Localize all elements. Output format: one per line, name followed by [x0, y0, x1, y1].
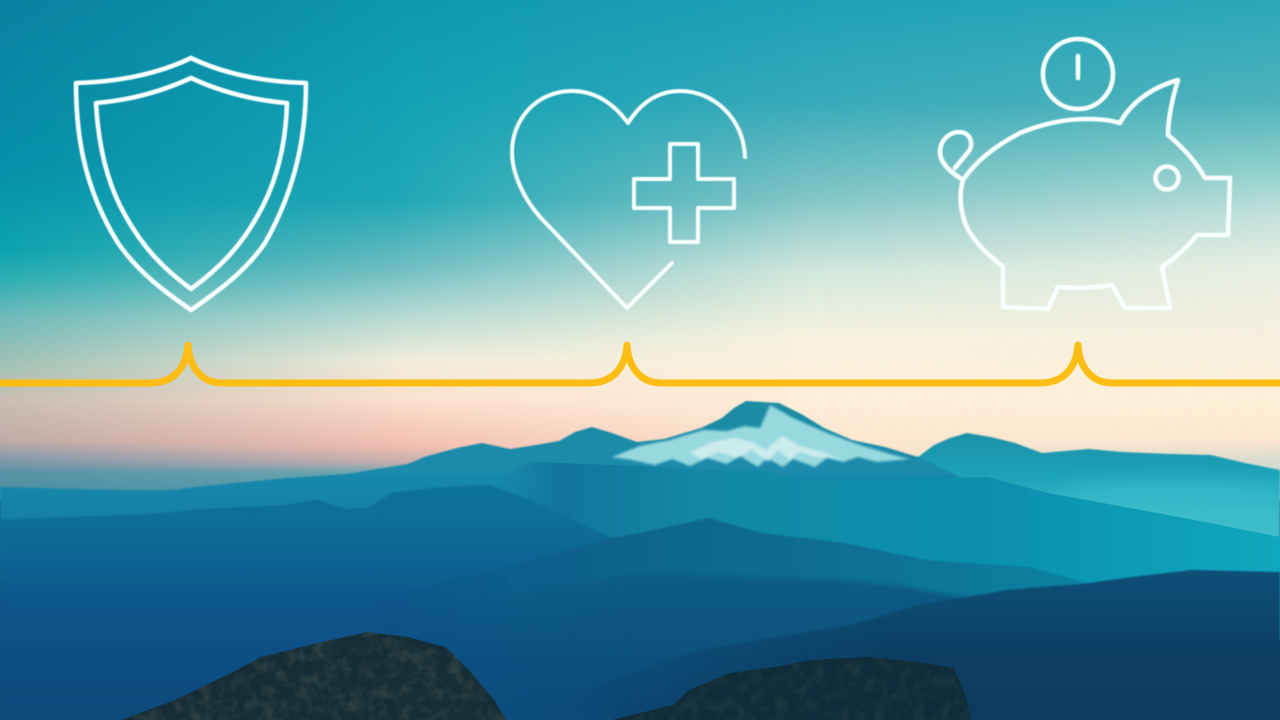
timeline: yellow line with three peaks	[0, 345, 1280, 383]
icon: piggy bank with coin	[940, 39, 1230, 309]
foreground rock: left	[122, 632, 506, 720]
pig eye	[1156, 166, 1178, 190]
icon: heart with plus	[512, 91, 745, 308]
far right range	[900, 433, 1280, 580]
centre ridge	[380, 518, 1085, 660]
mid teal range	[502, 462, 1280, 640]
left mid range	[0, 485, 700, 720]
coin slot mark	[1076, 56, 1080, 78]
background: mountain ranges	[0, 401, 1280, 720]
lower band	[558, 576, 964, 718]
snow highlights	[690, 436, 838, 462]
foreground rock: right	[612, 657, 971, 720]
icon: plus	[634, 144, 734, 242]
shade below centre ridge	[380, 590, 1020, 720]
snow cap	[612, 405, 910, 467]
pig body	[961, 80, 1230, 309]
pig tail	[940, 132, 971, 180]
mist on far right range	[1060, 478, 1280, 506]
coin	[1043, 39, 1113, 109]
dark foreground ridge	[656, 569, 1280, 720]
icon: shield	[76, 58, 306, 310]
background: sky gradient	[0, 0, 1280, 500]
main snow peak range	[0, 401, 985, 580]
